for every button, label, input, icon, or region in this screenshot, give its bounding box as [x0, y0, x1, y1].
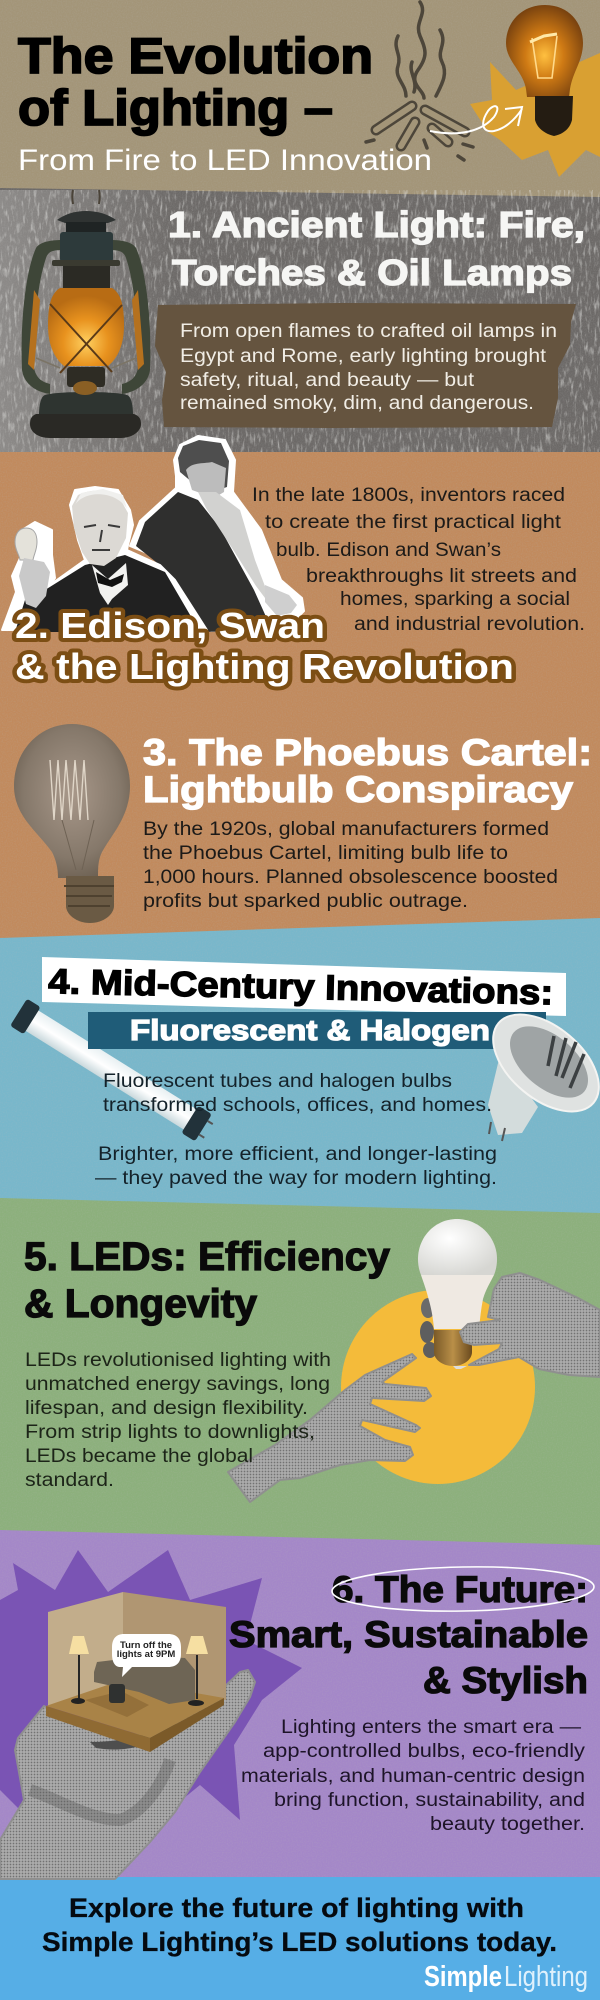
heading: section 1: Torches & Oil Lamps: [172, 252, 572, 293]
text block: section 5: From strip lights to downlights,: [25, 1422, 315, 1443]
heading: section 5: & Longevity: [24, 1282, 258, 1326]
text block: section 4: — they paved the way for modern lighting.: [95, 1168, 497, 1189]
panel: section 6 background: [0, 1530, 600, 1880]
text block: section 2: homes, sparking a social: [340, 589, 570, 610]
title: [18, 28, 373, 136]
subheading: section 4 banner: Fluorescent & Halogen: [130, 1015, 490, 1047]
heading: section 3: [143, 732, 592, 810]
text block: section 3: profits but sparked public outrage.: [143, 891, 468, 912]
text block: section 3: By the 1920s, global manufacturers formed: [143, 819, 549, 840]
illustration: purple starburst: [0, 1550, 302, 1850]
subtitle: From Fire to LED Innovation: [18, 144, 432, 177]
callout: speech bubble: Turn off the: [120, 1640, 172, 1651]
title: The Evolution: [18, 28, 373, 84]
panel: sections 2 and 3 background: [0, 452, 600, 945]
heading: section 3: 3. The Phoebus Cartel:: [143, 732, 592, 773]
arrow: white curl from fire to bulb: [430, 106, 522, 133]
text block: section 5: unmatched energy savings, long: [25, 1374, 330, 1395]
text block: section 1: Egypt and Rome, early lighting brought: [180, 346, 547, 367]
text block: section 2: to create the first practical light: [265, 512, 562, 533]
illustration: LED bulb in hand: [418, 1219, 600, 1377]
text block: section 2: bulb. Edison and Swan’s: [276, 540, 501, 561]
illustration: hand holding room: [0, 1670, 255, 1879]
illustration: fluorescent tube: [10, 999, 217, 1145]
heading: section 4 banner: 4. Mid-Century Innovations:: [48, 962, 554, 1012]
heading: section 2: 2. Edison, Swan: [15, 605, 325, 646]
text block: section 4: Brighter, more efficient, and longer-lasting: [98, 1144, 497, 1165]
text block: section 6: app-controlled bulbs, eco-friendly: [263, 1741, 586, 1762]
callout: speech bubble: [112, 1634, 181, 1677]
illustration: yellow circle: [341, 1290, 535, 1484]
text block: section 1: safety, ritual, and beauty — but: [180, 370, 475, 391]
text block: section 3: the Phoebus Cartel, limiting bulb life to: [143, 843, 508, 864]
heading: section 5: [24, 1235, 391, 1326]
illustration: oil lantern: [22, 190, 150, 438]
text block: section 3: [143, 819, 558, 912]
illustration: halogen bulb: [475, 996, 600, 1141]
text block: section 2: In the late 1800s, inventors raced: [252, 485, 565, 506]
logo: Simple Lighting: [424, 1961, 588, 1993]
heading: section 2: & the Lighting Revolution: [15, 646, 514, 687]
illustration: Swan portrait: [130, 436, 304, 632]
text block: section 4: transformed schools, offices, and homes.: [103, 1095, 492, 1116]
panel: section 1 background: [0, 188, 600, 460]
text block: section 6: materials, and human-centric design: [241, 1766, 585, 1787]
panel: section 4 background: [0, 918, 600, 1220]
text block: section 6: bring function, sustainability, and: [274, 1790, 585, 1811]
decorative oval around section 6 heading: [332, 1565, 594, 1613]
heading: section 2: [15, 605, 514, 687]
text block: section 2: and industrial revolution.: [354, 614, 585, 635]
text block: section 3: 1,000 hours. Planned obsolescence boosted: [143, 867, 558, 888]
text block: section 5: [25, 1350, 331, 1491]
heading: section 6: & Stylish: [423, 1660, 588, 1701]
illustration: Edison portrait: [2, 487, 207, 632]
heading: section 1: 1. Ancient Light: Fire,: [168, 204, 585, 245]
illustration: campfire: [366, 2, 473, 160]
text block: section 1: [155, 303, 576, 428]
panel: header background: [0, 0, 600, 230]
illustration: miniature room: [46, 1592, 226, 1752]
text block: section 6: beauty together.: [430, 1814, 585, 1835]
heading: section 1: [168, 204, 585, 293]
heading: section 6: [229, 1569, 588, 1701]
text block: section 5: LEDs became the global: [25, 1446, 253, 1467]
heading: section 5: 5. LEDs: Efficiency: [24, 1235, 391, 1279]
lighter wash behind the lantern: [0, 190, 180, 452]
heading: section 6: 6. The Future:: [332, 1569, 588, 1610]
text block: section 4: [95, 1071, 497, 1189]
text block: section 4: Fluorescent tubes and halogen bulbs: [103, 1071, 452, 1092]
illustration: vintage lightbulb: [14, 724, 130, 923]
text block: section 1: remained smoky, dim, and dangerous.: [180, 393, 534, 414]
heading: section 6: Smart, Sustainable: [229, 1614, 588, 1655]
callout: speech bubble: lights at 9PM: [117, 1649, 175, 1660]
text block: section 5: LEDs revolutionised lighting with: [25, 1350, 331, 1371]
text block: section 6: Lighting enters the smart era —: [281, 1717, 581, 1738]
illustration: glowing lightbulb: [506, 5, 583, 136]
call to action text: Simple Lighting’s LED solutions today.: [42, 1927, 557, 1957]
text block: section 5: standard.: [25, 1470, 114, 1491]
subheading: section 4 banner: [88, 1012, 546, 1049]
title: of Lighting –: [18, 80, 333, 136]
illustration: reaching hand: [228, 1354, 431, 1502]
illustration: orange starburst: [470, 53, 600, 177]
text block: section 2: breakthroughs lit streets and: [306, 566, 577, 587]
logo: Simple Lighting: Simple: [424, 1961, 502, 1993]
text block: section 6: [241, 1717, 586, 1835]
panel: call to action background: [0, 1877, 600, 2000]
text block: section 2: [252, 485, 585, 635]
call to action text: [42, 1893, 557, 1957]
panel: section 5 background: [0, 1198, 600, 1550]
heading: section 3: Lightbulb Conspiracy: [143, 769, 573, 810]
call to action text: Explore the future of lighting with: [69, 1893, 524, 1923]
text block: section 5: lifespan, and design flexibility.: [25, 1398, 308, 1419]
text block: section 1: From open flames to crafted oil lamps in: [180, 321, 557, 342]
